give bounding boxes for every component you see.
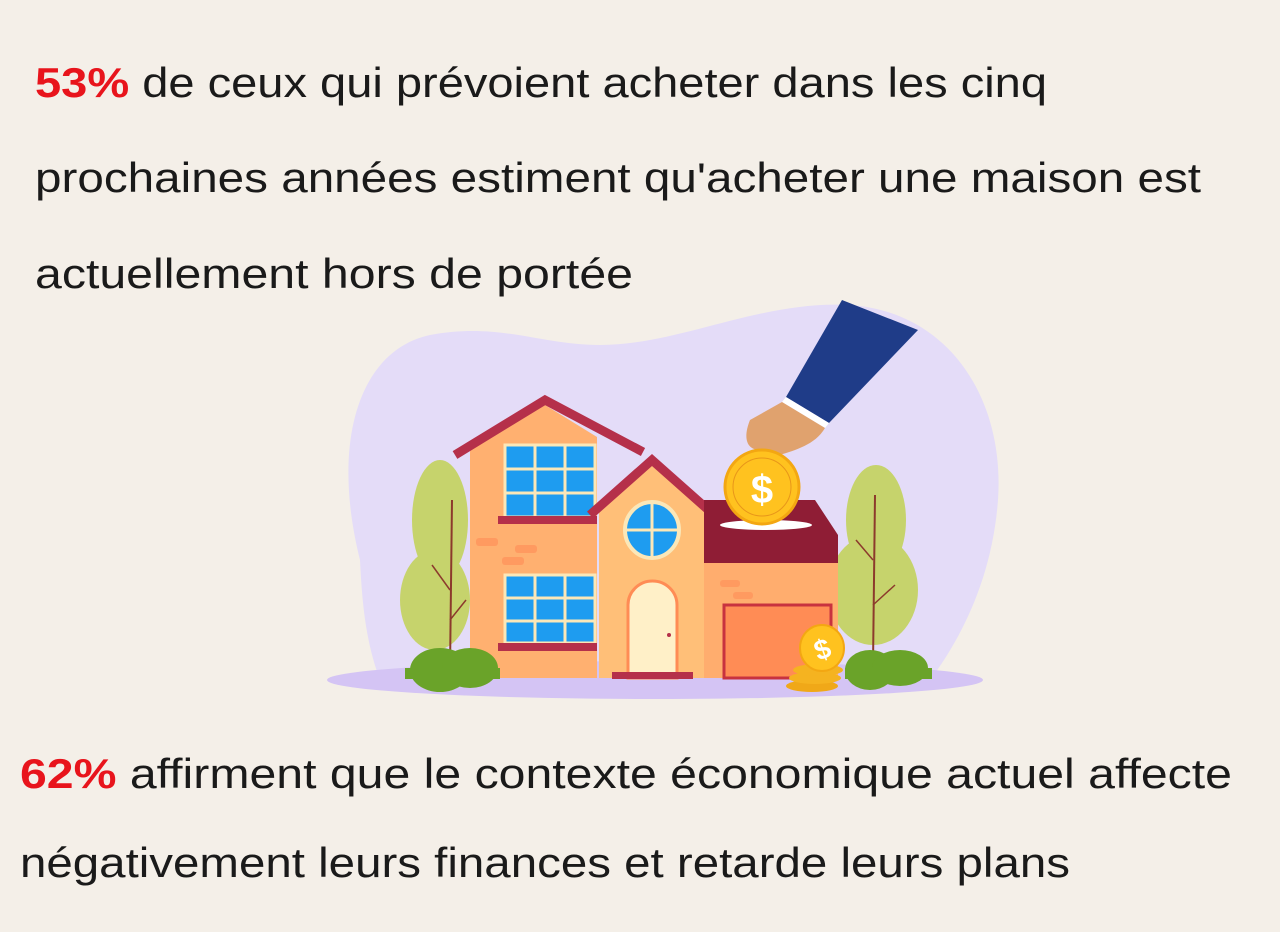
coin [725,450,799,524]
coin: $ [751,468,773,512]
ground ellipse [327,661,983,699]
hand with sleeve [746,300,918,478]
house middle gable section [590,460,714,679]
top text block: actuellement hors de portée [35,250,633,297]
house left tall section [455,400,643,678]
bottom text block [20,750,1232,886]
tree right [828,465,918,665]
top text block: prochaines années estiment qu'acheter une maison est [35,154,1201,201]
coin stack [786,625,844,692]
tree left [400,460,470,670]
top text block: 53% de ceux qui prévoient acheter dans les cinq [35,59,1047,106]
bottom text block: 62% affirment que le contexte économique actuel affecte [20,750,1232,797]
background blob [348,305,999,680]
coin stack: $ [810,632,836,667]
bottom text block: négativement leurs finances et retarde leurs plans [20,839,1070,886]
top text block [35,59,1201,297]
bushes [405,648,932,692]
illustration: house with coin [327,300,999,699]
garage section [704,500,838,678]
